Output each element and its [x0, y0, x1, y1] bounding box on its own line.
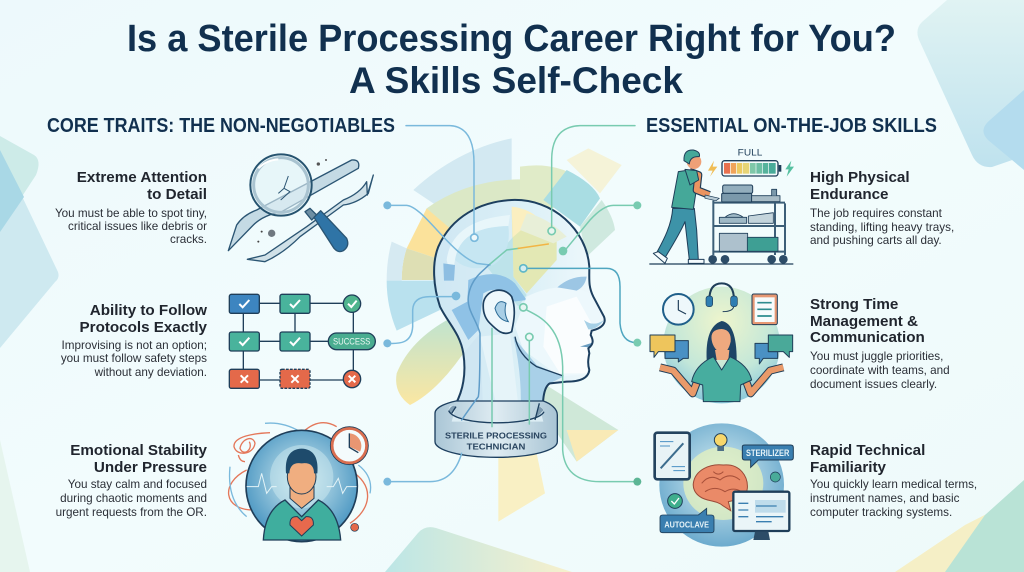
head silhouette: [434, 200, 607, 422]
central head diagram: [383, 126, 641, 522]
base collar: [435, 401, 557, 457]
right text blocks: [810, 169, 977, 519]
text: emotional stability: urgent requests from the OR.: [56, 506, 207, 519]
text: physical endurance: [810, 169, 954, 247]
text: emotional stability: during chaotic moments and: [60, 492, 207, 505]
left icons: [228, 154, 375, 542]
text: attention to detail: critical issues like debris or: [68, 220, 207, 233]
title: [127, 18, 896, 101]
text: follow protocols: you must follow safety steps: [61, 352, 207, 365]
text: physical endurance: and pushing carts all day.: [810, 234, 942, 247]
text: attention to detail: You must be able to spot tiny,: [55, 207, 207, 220]
text: attention to detail: cracks.: [170, 233, 207, 246]
heading: on-the-job skills: ESSENTIAL ON-THE-JOB SKILLS: [646, 114, 937, 137]
connector dots: [383, 201, 641, 486]
text: time and communication: You must juggle priorities,: [810, 350, 943, 363]
text: follow protocols: Protocols Exactly: [80, 319, 208, 336]
text: follow protocols: without any deviation.: [94, 366, 207, 379]
inner ear: [495, 302, 508, 322]
right icons: [649, 148, 794, 547]
text: emotional stability: Under Pressure: [94, 459, 207, 476]
base collar: TECHNICIAN: [467, 442, 525, 452]
icon: calm under pressure: [229, 423, 371, 542]
icon: technician pushing cart: FULL: [738, 148, 762, 158]
icon: time and communication: [650, 283, 793, 403]
base collar: STERILE PROCESSING: [445, 430, 547, 440]
text: follow protocols: Ability to Follow: [90, 302, 207, 319]
connector lines: [387, 126, 637, 482]
icon: protocol flowchart: [229, 294, 375, 388]
text: follow protocols: [61, 302, 208, 379]
text: technical familiarity: Rapid Technical: [810, 442, 925, 459]
text: physical endurance: standing, lifting heavy trays,: [810, 221, 954, 234]
icon: technical familiarity: STERILIZER: [746, 448, 790, 458]
text: attention to detail: [55, 169, 207, 246]
icon: technical familiarity: [655, 423, 793, 547]
text: attention to detail: to Detail: [147, 186, 207, 203]
ear: [483, 290, 514, 333]
text: time and communication: Communication: [810, 329, 925, 346]
text: emotional stability: You stay calm and focused: [68, 478, 207, 491]
text: technical familiarity: You quickly learn medical terms,: [810, 478, 977, 491]
icon: protocol flowchart: SUCCESS: [333, 336, 370, 346]
text: emotional stability: [56, 442, 208, 519]
text: time and communication: document issues clearly.: [810, 378, 937, 391]
text: time and communication: Strong Time: [810, 296, 898, 313]
text: physical endurance: High Physical: [810, 169, 910, 186]
text: physical endurance: Endurance: [810, 186, 888, 203]
text: technical familiarity: instrument names, and basic: [810, 492, 960, 505]
text: emotional stability: Emotional Stability: [70, 442, 208, 459]
heading: core traits: CORE TRAITS: THE NON-NEGOTIABLES: [47, 114, 395, 137]
left text blocks: [55, 169, 208, 519]
text: technical familiarity: [810, 442, 977, 519]
text: attention to detail: Extreme Attention: [77, 169, 207, 186]
text: physical endurance: The job requires constant: [810, 207, 943, 220]
text: time and communication: [810, 296, 950, 391]
text: technical familiarity: Familiarity: [810, 459, 887, 476]
text: technical familiarity: computer tracking systems.: [810, 506, 952, 519]
radiating colour wedges: [387, 138, 622, 522]
text: follow protocols: Improvising is not an option;: [61, 339, 207, 352]
icon: technical familiarity: AUTOCLAVE: [664, 519, 709, 529]
text: time and communication: Management &: [810, 313, 918, 330]
icon: technician pushing cart: [649, 148, 794, 264]
title: Is a Sterile Processing Career Right for You?: [127, 18, 896, 60]
title: A Skills Self-Check: [349, 60, 683, 101]
text: time and communication: coordinate with teams, and: [810, 364, 950, 377]
icon: magnifier and forceps: [228, 154, 373, 262]
